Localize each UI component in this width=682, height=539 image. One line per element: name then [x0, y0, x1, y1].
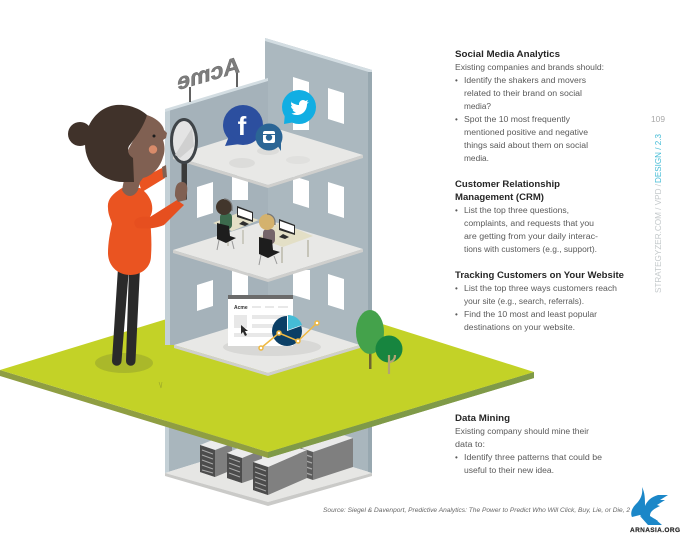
text block: Social Media Analytics: mentioned positive and negative — [464, 128, 589, 137]
icon: trees — [356, 310, 402, 374]
text block: Data Mining: Data Mining — [455, 413, 510, 423]
person two — [259, 214, 280, 265]
text block: Social Media Analytics: • — [455, 76, 458, 85]
floor: top — [173, 126, 363, 188]
sidebar: vertical section label — [654, 133, 663, 293]
chart: line — [259, 321, 319, 350]
text block: Social Media Analytics: Identify the shakers and movers — [464, 76, 586, 85]
text block: Customer Relationship Management: Customer Relationship — [455, 179, 561, 189]
windows — [197, 77, 344, 311]
text block: Customer Relationship Management — [455, 179, 598, 254]
text block: Customer Relationship Management: tions with customers (e.g., support). — [464, 245, 597, 254]
server: back right — [298, 434, 353, 480]
text block: Tracking Customers on Your Website: Find the 10 most and least popular — [464, 310, 597, 319]
text block: Social Media Analytics: related to their brand on social — [464, 89, 582, 98]
server: left — [200, 439, 232, 477]
text block: Tracking Customers on Your Website: • — [455, 284, 458, 293]
text block: Data Mining: useful to their new idea. — [464, 466, 554, 475]
text block: Social Media Analytics — [455, 49, 604, 163]
text block: Data Mining: Identify three patterns that could be — [464, 453, 603, 462]
sidebar: vertical section label: DESIGN / 2.3 — [654, 133, 663, 183]
floor: middle — [173, 220, 363, 282]
person one — [216, 199, 236, 250]
panel: basement with servers — [165, 420, 372, 506]
icon: facebook bubble: f — [238, 111, 247, 141]
eye — [152, 134, 156, 138]
text block: Social Media Analytics: Spot the 10 most frequently — [464, 115, 570, 124]
text block: Customer Relationship Management: complaints, and requests that you — [464, 219, 594, 228]
server: front — [253, 447, 307, 495]
panel: green ground plane — [0, 288, 534, 458]
icon: facebook bubble — [223, 105, 263, 146]
text block: Customer Relationship Management: List the top three questions, — [464, 206, 569, 215]
illustration: browser window with charts: Acme — [234, 305, 248, 311]
legs — [112, 268, 140, 366]
floor: bottom — [174, 316, 360, 376]
page number: 109 — [651, 115, 666, 124]
text block: Customer Relationship Management: Management (CRM) — [455, 192, 544, 202]
icon: instagram bubble — [256, 124, 282, 151]
text block: Social Media Analytics: Social Media Analytics — [455, 49, 560, 59]
logo: blue griffin watermark: ARNASIA.ORG — [630, 527, 680, 534]
text block: Customer Relationship Management: • — [455, 206, 458, 215]
front arm — [134, 200, 184, 229]
text block: Tracking Customers on Your Website — [455, 270, 624, 332]
icon: cursor — [241, 325, 248, 336]
logo: blue griffin watermark — [630, 487, 680, 534]
text block: Social Media Analytics: media. — [464, 154, 489, 163]
text block: Tracking Customers on Your Website: • — [455, 310, 458, 319]
body — [108, 188, 152, 275]
sign: mirrored Acme: Acme — [177, 51, 240, 95]
panel: building upper floors — [165, 38, 372, 376]
source note: Source: Siegel & Davenport, Predictive Analytics: The Power to Predict Who Will Click, Buy, Lie, or Die, 2 — [323, 508, 631, 514]
wall: left — [165, 79, 268, 345]
hair — [68, 105, 147, 182]
text block: Customer Relationship Management: are getting from your daily interac- — [464, 232, 598, 241]
illustration: browser window with charts — [228, 295, 319, 350]
text block: Data Mining: data to: — [455, 440, 485, 449]
text block: Social Media Analytics: things said about them on social — [464, 141, 588, 150]
wall: right — [265, 38, 372, 345]
text block: Social Media Analytics: Existing companies and brands should: — [455, 63, 604, 72]
sidebar: vertical section label: STRATEGYZER.COM / VPD / — [654, 183, 663, 293]
text block: Social Media Analytics: media? — [464, 102, 492, 111]
text block: Data Mining: Existing company should mine their — [455, 427, 589, 436]
desk two — [258, 219, 313, 263]
back arm — [138, 168, 165, 192]
cheek — [149, 145, 157, 154]
icon: twitter bubble — [282, 90, 316, 124]
hand — [175, 182, 187, 202]
text block: Social Media Analytics: • — [455, 115, 458, 124]
shadow — [95, 353, 153, 373]
text block: Data Mining — [455, 413, 603, 475]
text block: Tracking Customers on Your Website: destinations on your website. — [464, 323, 575, 332]
text block: Tracking Customers on Your Website: your site (e.g., search, referrals). — [464, 297, 584, 306]
text block: Data Mining: • — [455, 453, 458, 462]
text block: Tracking Customers on Your Website: Tracking Customers on Your Website — [455, 270, 624, 280]
illustration: call center desks — [213, 199, 313, 265]
server: middle — [227, 446, 262, 483]
magnifying glass — [172, 120, 196, 200]
illustration: person with magnifying glass — [68, 105, 196, 373]
text block: Tracking Customers on Your Website: List the top three ways customers reach — [464, 284, 617, 293]
desk one — [213, 206, 259, 246]
chart: pie — [272, 315, 302, 346]
neck and face — [122, 115, 167, 196]
